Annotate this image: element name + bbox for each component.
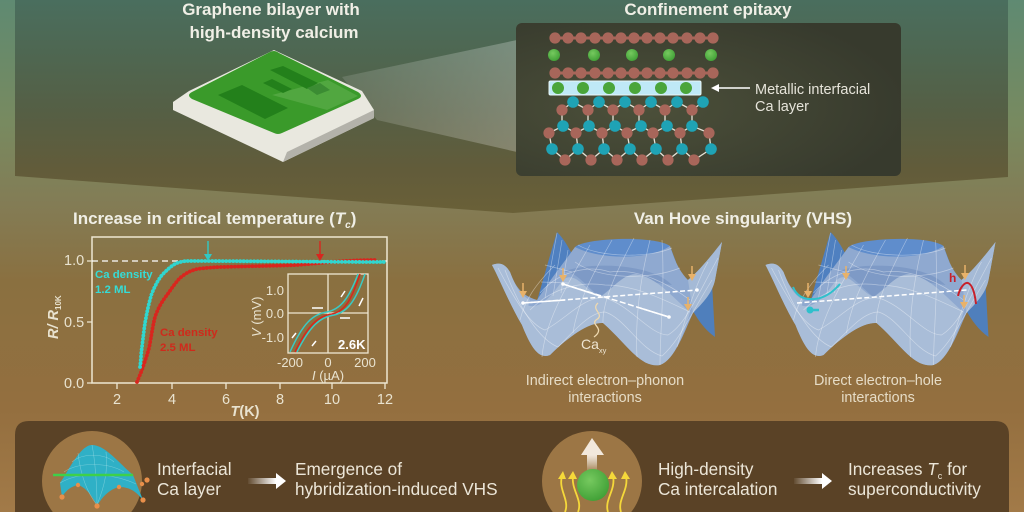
axis labels: 0.0 xyxy=(64,376,84,392)
icon: hybridization dome xyxy=(42,431,150,512)
inset chart: V vs I: 200 xyxy=(354,355,376,370)
text: interfacial Ca layer: Ca layer xyxy=(157,479,221,499)
text: high-density Ca intercalation xyxy=(658,459,777,499)
diagram: indirect electron-phonon surface: Ca xyxy=(581,336,599,352)
caption: direct electron-hole interactions: Direct electron–hole xyxy=(814,373,942,389)
top panel with chevron edge xyxy=(15,0,1008,213)
label: metallic interfacial Ca layer: Metallic interfacial xyxy=(755,82,870,98)
text: interfacial Ca layer xyxy=(157,459,232,499)
inset chart: V vs I: 0.0 xyxy=(266,306,284,321)
label: metallic interfacial Ca layer: Ca layer xyxy=(755,99,809,115)
axis labels: 8 xyxy=(276,392,284,408)
axis labels: R/ R xyxy=(46,310,62,339)
caption: indirect electron-phonon interactions: Indirect electron–phonon xyxy=(526,373,684,389)
caption: direct electron-hole interactions: interactions xyxy=(841,390,915,406)
graphene and calcium top layers xyxy=(548,32,719,79)
axis labels: 6 xyxy=(222,392,230,408)
heading: graphene bilayer xyxy=(182,0,360,42)
heading: confinement epitaxy: Confinement epitaxy xyxy=(624,0,792,19)
inset chart: V vs I: 0 xyxy=(324,355,332,370)
diagram: indirect electron-phonon surface: xy xyxy=(599,346,607,355)
axis labels: 4 xyxy=(168,392,176,408)
icon: calcium atom with arrows xyxy=(542,431,642,512)
label: Ca density 2.5 ML xyxy=(160,327,218,354)
text: high-density Ca intercalation: High-density xyxy=(658,459,754,479)
inset chart: V vs I: V (mV) xyxy=(249,297,264,337)
text: increases Tc for superconductivity: for xyxy=(942,459,967,479)
arrow to Ca layer xyxy=(711,84,750,92)
axis labels: 10 xyxy=(324,392,340,408)
axis labels: 10K xyxy=(54,295,63,310)
diagram: indirect electron-phonon surface xyxy=(492,232,722,365)
panel: confinement epitaxy xyxy=(516,23,901,176)
heading: van hove singularity: Van Hove singularity (VHS) xyxy=(634,209,852,228)
axis labels: 2 xyxy=(113,392,121,408)
inset chart: V vs I: 1.0 xyxy=(266,283,284,298)
chart: resistance vs temperature xyxy=(46,237,393,420)
label: Ca density 1.2 ML: Ca density xyxy=(95,269,153,281)
label: metallic interfacial Ca layer xyxy=(755,82,870,115)
axis labels: 12 xyxy=(377,392,393,408)
label: Ca density 2.5 ML: 2.5 ML xyxy=(160,342,195,354)
heading: graphene bilayer: Graphene bilayer with xyxy=(182,0,360,19)
caption: direct electron-hole interactions xyxy=(814,373,942,406)
panel: summary xyxy=(15,421,1009,512)
text: increases Tc for superconductivity: superconductivity xyxy=(848,479,981,499)
text: emergence of hybridization-induced VHS: Emergence of xyxy=(295,459,402,479)
text: high-density Ca intercalation: Ca intercalation xyxy=(658,479,777,499)
label: Ca density 2.5 ML: Ca density xyxy=(160,327,218,339)
axis labels xyxy=(46,253,393,420)
data: Ca density 1.2 ML xyxy=(140,261,385,367)
inset chart: V vs I: -200 xyxy=(277,355,303,370)
inset chart: V vs I: I (µA) xyxy=(312,368,344,383)
inset chart: V vs I: -1.0 xyxy=(262,330,284,345)
substrate lattice xyxy=(543,96,717,166)
inset chart: V vs I: 2.6K xyxy=(338,337,366,352)
caption: indirect electron-phonon interactions: interactions xyxy=(568,390,642,406)
icon: graphene chip xyxy=(173,50,374,162)
text: emergence of hybridization-induced VHS: hybridization-induced VHS xyxy=(295,479,498,499)
label: Ca density 1.2 ML: 1.2 ML xyxy=(95,284,130,296)
marker arrows xyxy=(204,241,324,261)
diagram: direct electron-hole surface: h xyxy=(949,271,956,285)
caption: indirect electron-phonon interactions xyxy=(526,373,684,406)
heading: increase in critical temperature: Increase in critical temperature (T xyxy=(73,209,345,228)
metallic interfacial Ca layer xyxy=(549,81,701,95)
heading: increase in critical temperature: c xyxy=(345,220,351,231)
axis labels: 1.0 xyxy=(64,253,84,269)
heading: graphene bilayer: high-density calcium xyxy=(189,23,359,42)
label: Ca density 1.2 ML xyxy=(95,269,153,296)
light beam from chip to epitaxy panel xyxy=(342,40,517,152)
heading: increase in critical temperature: ) xyxy=(351,209,356,228)
diagram: direct electron-hole surface xyxy=(766,232,996,365)
axis labels: T(K) xyxy=(230,404,260,420)
text: interfacial Ca layer: Interfacial xyxy=(157,459,232,479)
axis labels: 0.5 xyxy=(64,315,84,331)
text: increases Tc for superconductivity xyxy=(848,459,981,499)
data: Ca density 2.5 ML xyxy=(137,260,377,382)
text: emergence of hybridization-induced VHS xyxy=(295,459,498,499)
inset chart: V vs I xyxy=(249,274,376,383)
arrow xyxy=(794,473,832,489)
text: increases Tc for superconductivity: c xyxy=(938,471,943,481)
arrow xyxy=(248,473,286,489)
text: increases Tc for superconductivity: Increases T xyxy=(848,459,938,479)
